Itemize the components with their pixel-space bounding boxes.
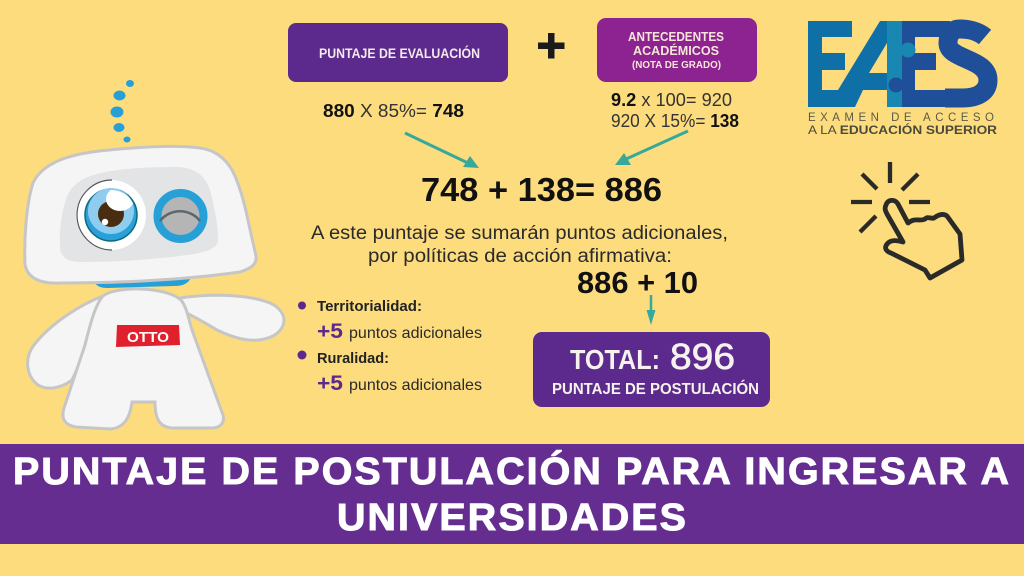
- body: [63, 289, 223, 429]
- left eye: [76, 180, 146, 250]
- head: [25, 146, 256, 283]
- box: puntaje de evaluacion: PUNTAJE DE EVALUACIÓN: [319, 46, 480, 61]
- bullet: ruralidad: Ruralidad:: [317, 350, 389, 367]
- formula: antecedentes: 9.2 x 100= 920: [611, 89, 732, 110]
- additional sum: 886 + 10: [577, 265, 698, 300]
- box: puntaje de evaluacion: [288, 23, 508, 82]
- bullet: territorialidad: Territorialidad:: [317, 298, 422, 315]
- face panel: [60, 167, 218, 262]
- total box: PUNTAJE DE POSTULACIÓN: [552, 379, 759, 398]
- logo: EAES: [808, 21, 997, 137]
- title band: PUNTAJE DE POSTULACIÓN PARA INGRESAR A: [13, 449, 1011, 493]
- right eye closed: [158, 193, 204, 239]
- formula: antecedentes: 920 X 15%= 138: [611, 110, 739, 131]
- explanation text: [311, 223, 728, 267]
- points: territorialidad: [317, 320, 482, 343]
- box: antecedentes academicos: ANTECEDENTES: [628, 30, 724, 44]
- logo letters: [808, 21, 988, 107]
- arrow: left to sum: [405, 133, 479, 168]
- plus sign: [538, 33, 564, 58]
- box: antecedentes academicos: [597, 18, 757, 82]
- points: ruralidad: +5: [317, 372, 343, 395]
- formula: evaluacion: 880 X 85%= 748: [323, 100, 464, 121]
- robot mascot: [25, 80, 284, 429]
- title band: [0, 444, 1024, 544]
- left arm: [28, 296, 103, 388]
- icon: tap hand: [851, 162, 962, 278]
- points: ruralidad: [317, 372, 482, 395]
- sum result: 748 + 138= 886: [421, 171, 662, 208]
- box: antecedentes academicos: ACADÉMICOS: [633, 43, 719, 58]
- right arm: [180, 295, 284, 340]
- total box: [533, 332, 770, 407]
- arrow: down to total: [646, 295, 656, 325]
- title band: UNIVERSIDADES: [337, 497, 688, 539]
- formula: antecedentes: [611, 89, 739, 131]
- arrow: right to sum: [615, 131, 688, 165]
- name tag: OTTO: [127, 329, 169, 346]
- antenna dots: [110, 80, 134, 142]
- name tag: [116, 325, 180, 347]
- total box: TOTAL:: [570, 344, 660, 375]
- total box: 896: [670, 336, 735, 377]
- points: ruralidad: puntos adicionales: [349, 377, 482, 394]
- logo: EAES: EXAMEN DE ACCESO: [808, 112, 994, 124]
- explanation text: por políticas de acción afirmativa:: [368, 246, 672, 267]
- points: territorialidad: +5: [317, 320, 343, 343]
- explanation text: A este puntaje se sumarán puntos adicionales,: [311, 223, 728, 244]
- logo: EAES: A LA EDUCACIÓN SUPERIOR: [808, 122, 997, 137]
- neck: [92, 274, 192, 288]
- points: territorialidad: puntos adicionales: [349, 325, 482, 342]
- bonus list: [298, 298, 482, 395]
- box: antecedentes academicos: (NOTA DE GRADO): [632, 60, 721, 71]
